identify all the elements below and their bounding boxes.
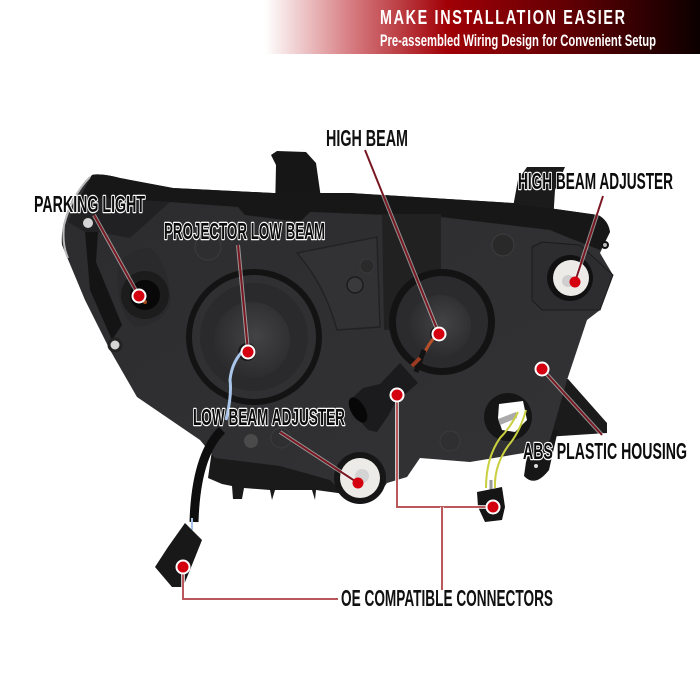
lower left wire connector (155, 523, 202, 587)
moulded circles (360, 259, 374, 273)
raised centre panel (297, 237, 380, 330)
bottom bracket (208, 450, 345, 500)
callout: oe compatible connectors (183, 395, 553, 611)
low beam wiring: blue wire, black sleeve (192, 348, 246, 530)
low beam adjuster knob (334, 452, 386, 504)
red marker dots (132, 276, 580, 574)
yellow wires and small connector (477, 410, 526, 522)
callout: high beam: HIGH BEAM (326, 125, 408, 151)
screws (82, 217, 94, 229)
top left mounting tab (271, 151, 323, 212)
callout: low beam adjuster: LOW BEAM ADJUSTER (193, 404, 345, 430)
callout: projector low beam: PROJECTOR LOW BEAM (164, 218, 325, 244)
wire pass-through hole (484, 393, 532, 441)
header banner (265, 0, 700, 54)
vertical dark recess (382, 214, 441, 330)
parking light socket (117, 248, 171, 327)
headlight housing (62, 151, 613, 500)
low beam projector dust cap (186, 269, 322, 405)
callout: parking light (34, 191, 145, 296)
upper left shaded area (68, 198, 170, 238)
dark top rim (76, 174, 610, 250)
left dark channel (85, 232, 122, 340)
high beam adjuster box and knob (532, 242, 613, 310)
top right mounting tab (513, 167, 565, 222)
right lower bracket (545, 379, 607, 437)
high beam dust cap (389, 269, 495, 375)
callout: high beam (326, 125, 439, 334)
header title: MAKE INSTALLATION EASIER (380, 5, 625, 29)
callout: low beam adjuster (193, 404, 358, 483)
callout: abs plastic housing (523, 369, 687, 464)
callout: projector low beam (164, 218, 325, 351)
housing body (62, 174, 613, 498)
callout: parking light: PARKING LIGHT (34, 191, 145, 217)
callout: oe compatible connectors: OE COMPATIBLE CONNECTORS (341, 585, 553, 611)
callout: high beam adjuster (518, 168, 673, 282)
clear lens edge (64, 177, 90, 258)
high beam wire connector (345, 358, 420, 432)
lower lug (524, 430, 558, 481)
